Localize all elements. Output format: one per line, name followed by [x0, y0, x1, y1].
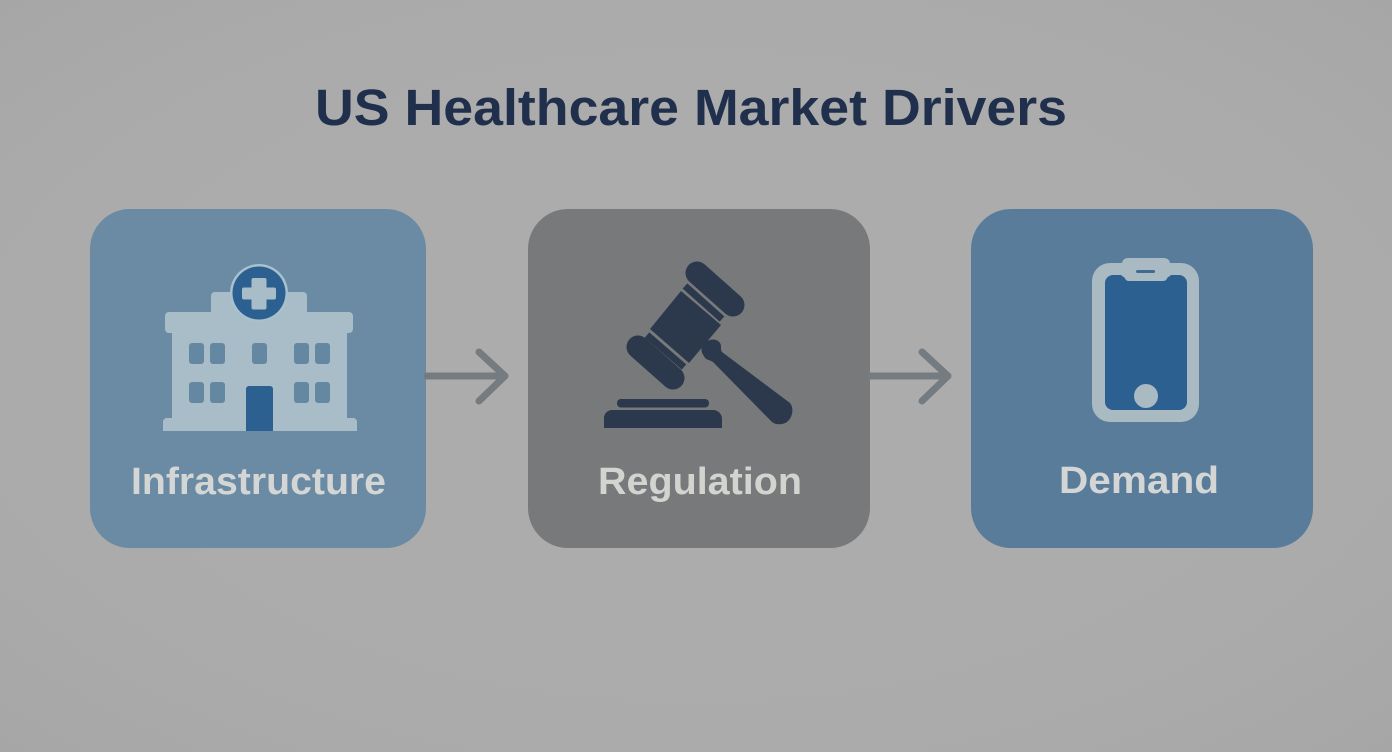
title: US Healthcare Market Drivers: [315, 79, 1067, 136]
icon: gavel: [604, 273, 792, 428]
icon: hospital: [163, 264, 357, 431]
label: regulation: Regulation: [598, 461, 802, 503]
label: infrastructure: Infrastructure: [131, 461, 386, 503]
panel: demand: [971, 209, 1313, 548]
panel: regulation: [528, 209, 870, 548]
label: demand: Demand: [1059, 460, 1219, 502]
arrow: infrastructure to regulation: [427, 352, 505, 401]
panel: infrastructure: [90, 209, 426, 548]
arrow: regulation to demand: [871, 352, 948, 401]
icon: smartphone: [1092, 258, 1199, 422]
